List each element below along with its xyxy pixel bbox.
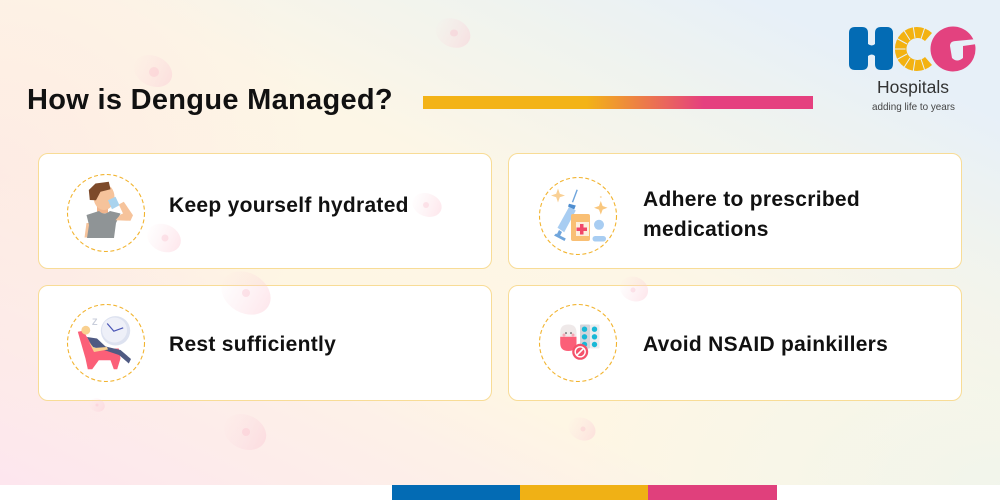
panel: avoid NSAID painkillers	[508, 285, 962, 401]
logo	[849, 26, 976, 113]
icon: man drinking water	[66, 174, 146, 252]
label: Avoid NSAID painkillers	[643, 333, 888, 356]
icon: pills with prohibition sign	[538, 304, 618, 382]
label: Keep yourself hydrated	[169, 194, 409, 217]
panel: rest sufficiently	[38, 285, 492, 401]
label: Adhere to prescribed medications	[643, 188, 860, 241]
title gradient rule	[423, 96, 813, 109]
icon: person resting with clock: Z	[92, 316, 98, 326]
bottom colour bar	[392, 485, 777, 500]
title: How is Dengue Managed?	[27, 84, 393, 116]
panel: keep yourself hydrated	[38, 153, 492, 269]
logo letter G	[930, 26, 977, 72]
logo tagline: adding life to years	[872, 101, 955, 113]
panel: adhere to prescribed medications	[508, 153, 962, 269]
label: Rest sufficiently	[169, 333, 336, 356]
icon: syringe and medicine	[538, 177, 618, 255]
icon: person resting with clock	[66, 304, 146, 382]
logo letter H	[849, 27, 893, 70]
logo wordmark: Hospitals	[877, 77, 949, 97]
logo letter C sunburst	[894, 25, 932, 73]
